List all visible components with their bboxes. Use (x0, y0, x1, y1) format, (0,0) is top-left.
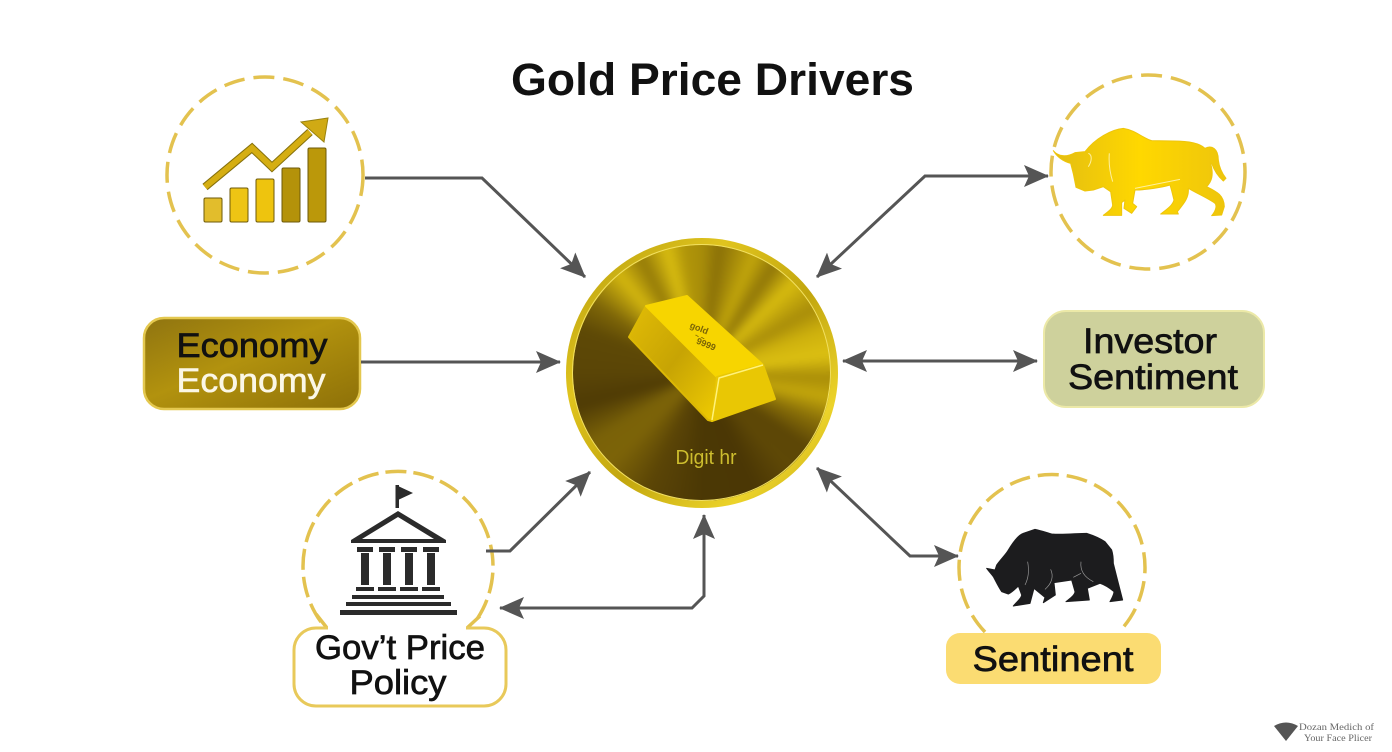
icon: gold bull in dashed circle (1051, 75, 1245, 269)
watermark logo and text: Dozan Medich of (1299, 722, 1374, 732)
arrow: government to gold (486, 472, 590, 551)
panel: Investor Sentiment label: Sentiment (1068, 358, 1238, 397)
coin caption: Digit hr (676, 447, 737, 469)
title: Gold Price Drivers (511, 54, 914, 105)
watermark logo and text: Your Face Plicer (1304, 733, 1372, 743)
gold bar (629, 296, 775, 421)
icon: black bear with Sentinent label: Sentinent (972, 640, 1134, 679)
gold bar: ~ ~ (694, 332, 706, 343)
icon: government building with label callout: Policy (350, 664, 446, 702)
watermark logo and text (1274, 722, 1374, 743)
central gold coin with gold bar (566, 238, 838, 508)
gold bar: 9999 (695, 336, 717, 353)
icon: rising bar chart in dashed circle (167, 77, 363, 273)
panel: Economy label: Economy (176, 362, 326, 400)
gold bar: gold (688, 320, 710, 336)
arrow: policy and gold two-way (500, 515, 704, 608)
arrow: Investor Sentiment and gold two-way (843, 360, 1037, 362)
arrow: bull and gold two-way (817, 176, 1048, 277)
arrow: Economy to gold (361, 360, 560, 364)
arrow: bear and gold two-way (817, 468, 958, 556)
icon: government building with label callout: Gov’t Price (315, 629, 485, 667)
icon: government building with label callout (294, 471, 506, 706)
panel: Investor Sentiment label: Investor (1083, 322, 1217, 361)
panel: Economy label: Economy (176, 327, 328, 365)
arrow: growth to gold (365, 178, 585, 277)
panel: Investor Sentiment label (1044, 311, 1264, 407)
panel: Economy label (144, 318, 360, 409)
icon: black bear with Sentinent label (946, 475, 1161, 684)
